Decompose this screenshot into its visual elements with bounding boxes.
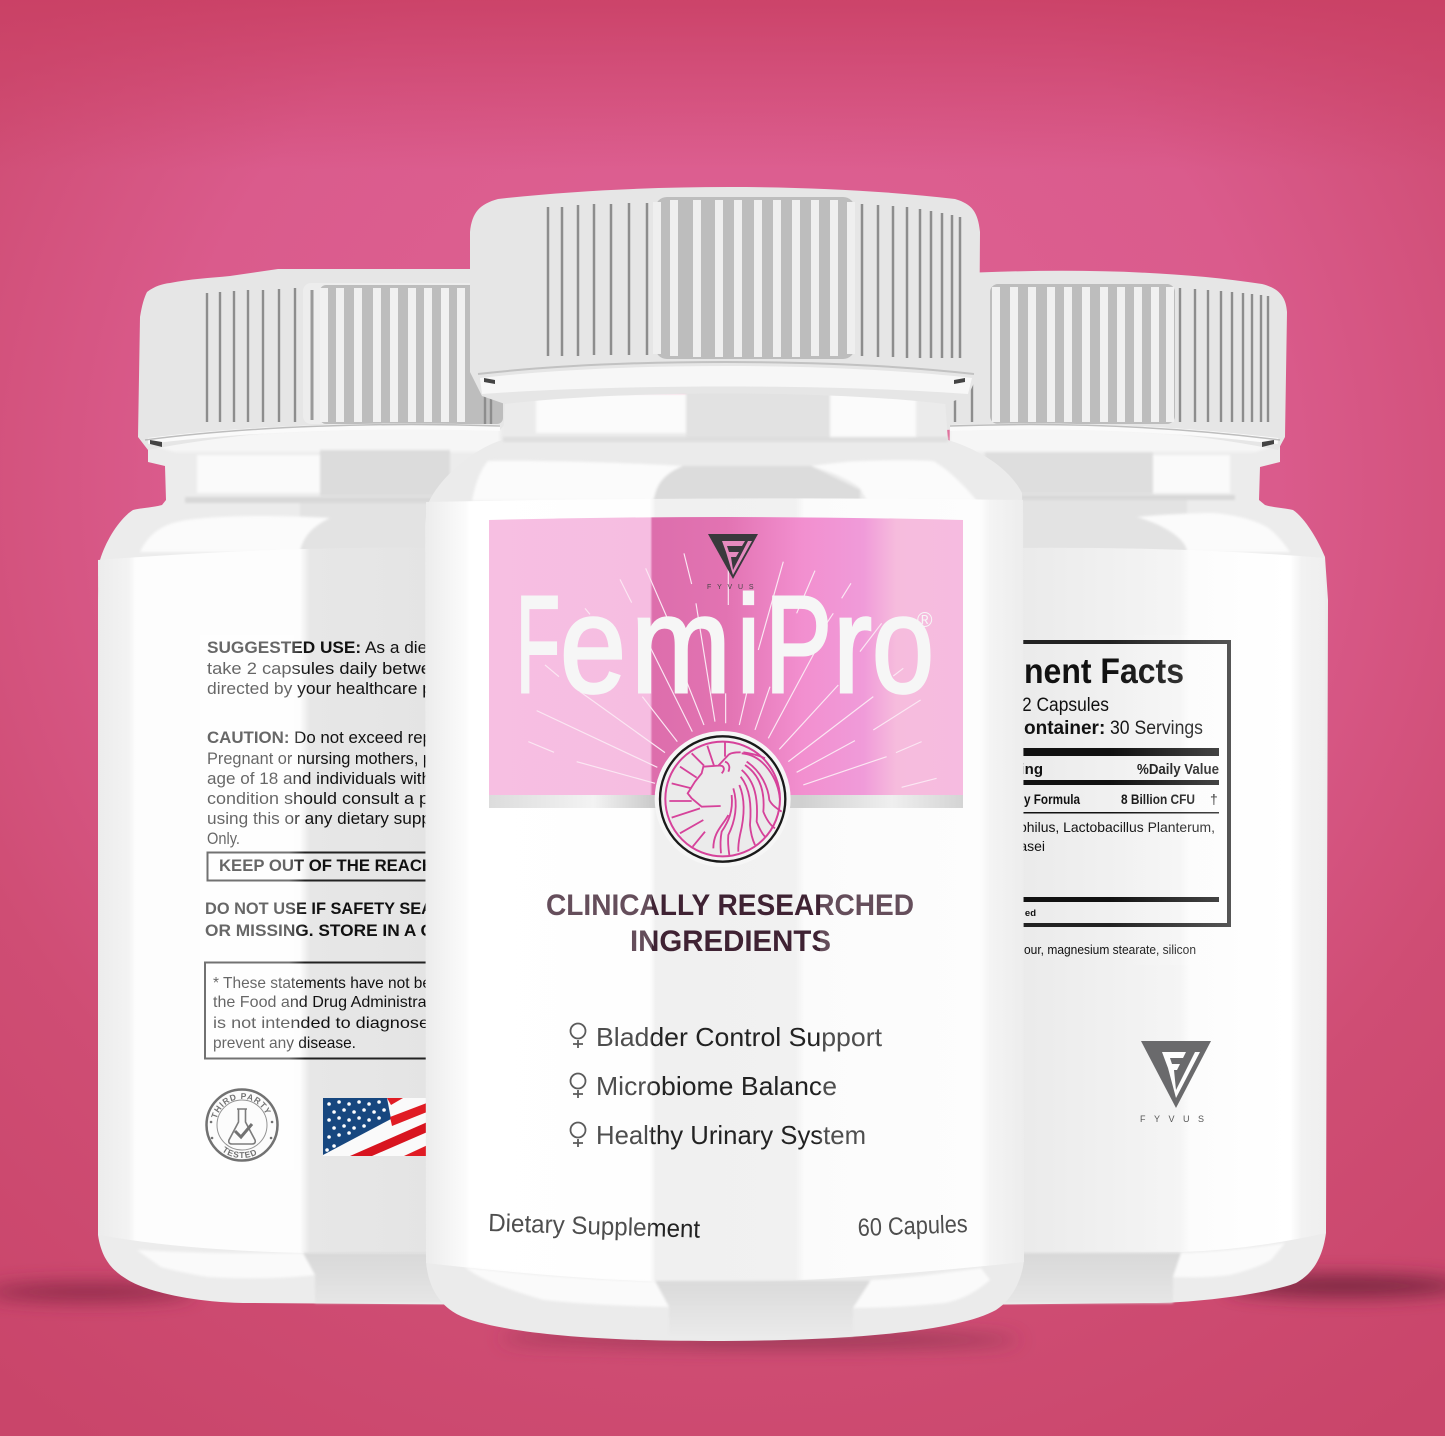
left bottle label text: SUGGESTED USE: As a diet — [207, 639, 432, 657]
storage warning: OR MISSING. STORE IN A C — [205, 921, 433, 940]
supplement facts panel: ing — [1020, 761, 1043, 778]
benefit: microbiome: Microbiome Balance — [596, 1071, 837, 1101]
supplement facts panel — [1010, 642, 1229, 957]
left bottle: back label — [98, 269, 505, 1305]
left bottle label text: age of 18 and individuals with — [207, 770, 431, 788]
dietary supplement label: Dietary Supplement — [488, 1209, 701, 1244]
benefits list — [570, 1022, 883, 1150]
supplement facts panel: nent Facts — [1024, 652, 1184, 691]
right bottle base — [950, 1243, 1285, 1303]
FDA statement box: the Food and Drug Administrat — [213, 994, 432, 1011]
sun rays — [528, 553, 937, 787]
right bottle neck — [950, 427, 1290, 552]
center bottle cap — [470, 187, 980, 404]
icon: third party tested badge — [205, 1088, 279, 1162]
center bottle shoulder — [472, 460, 977, 502]
supplement facts panel: %Daily Value — [1137, 762, 1219, 778]
keep out box: KEEP OUT OF THE REACH — [219, 856, 434, 875]
left bottle label text: using this or any dietary supp — [207, 810, 431, 828]
icon: third party tested badge: THIRD PARTY — [211, 1093, 271, 1118]
left bottle silhouette — [98, 425, 520, 1305]
benefit: bladder control: Bladder Control Support — [596, 1022, 883, 1052]
headline: CLINICALLY RESEARCHED — [546, 889, 914, 922]
supplement facts panel: 2 Capsules — [1022, 695, 1109, 716]
FDA statement box: prevent any disease. — [213, 1035, 356, 1052]
supplement facts panel: ed — [1025, 908, 1036, 919]
brand name: FemiPro: m — [631, 568, 731, 722]
headline: INGREDIENTS — [630, 925, 831, 958]
left bottle label text: take 2 capsules daily betwe — [207, 660, 431, 678]
keep out box — [208, 852, 434, 880]
storage warning — [205, 899, 433, 940]
left bottle cap — [138, 269, 505, 450]
brand name: FemiPro: i — [737, 568, 760, 722]
icon: fyvus logo — [1140, 1041, 1213, 1124]
supplement facts panel: asei — [1019, 838, 1045, 854]
brand name: FemiPro: ® — [917, 609, 933, 632]
left bottle label surface — [98, 548, 440, 1253]
right bottle cap — [945, 271, 1287, 450]
icon: woman emblem — [655, 731, 791, 867]
brand name: FemiPro: r — [833, 568, 872, 722]
brand name: FemiPro: o — [872, 568, 934, 722]
left bottle label text: condition should consult a p — [207, 790, 429, 808]
supplement facts panel: y Formula — [1024, 791, 1080, 807]
right bottle: supplement facts — [945, 271, 1328, 1305]
brand name: FemiPro — [516, 568, 934, 722]
brand name: FemiPro: F — [516, 568, 560, 722]
center bottle base — [465, 1267, 990, 1336]
brand name: FemiPro: e — [560, 568, 626, 722]
right bottle silhouette — [950, 425, 1328, 1305]
capsule count: 60 Capules — [857, 1210, 968, 1242]
left bottle base — [137, 1250, 520, 1303]
benefit: urinary system: Healthy Urinary System — [596, 1120, 866, 1150]
left bottle neck — [140, 427, 500, 553]
FDA statement box: is not intended to diagnose — [213, 1015, 429, 1032]
icon: fyvus logo on label — [707, 534, 759, 591]
right bottle label surface — [1000, 548, 1326, 1253]
icon: fyvus logo: FYVUS — [1140, 1114, 1213, 1124]
floor shadow — [0, 1275, 1445, 1346]
icon: fyvus logo on label: FYVUS — [707, 584, 759, 591]
left bottle label text: Pregnant or nursing mothers, p — [207, 750, 432, 768]
center bottle silhouette — [425, 400, 1024, 1341]
supplement facts panel: 8 Billion CFU — [1121, 791, 1195, 807]
headline — [546, 889, 914, 958]
glossy highlights over label — [489, 880, 980, 1250]
center bottle neck — [503, 390, 948, 442]
pink label band — [489, 517, 963, 808]
supplement facts panel: our, magnesium stearate, silicon — [1024, 943, 1196, 957]
supplement facts panel: † — [1210, 791, 1218, 807]
FDA statement box — [205, 962, 433, 1058]
icon: american flag — [323, 1098, 432, 1156]
icon: third party tested badge: TESTED — [224, 1146, 256, 1158]
supplement facts panel: 30 Servings — [1110, 718, 1203, 739]
supplement facts panel: ontainer: — [1024, 718, 1105, 739]
center bottle label surface — [426, 498, 1024, 1283]
storage warning: DO NOT USE IF SAFETY SEA — [205, 899, 433, 918]
brand name: FemiPro: P — [765, 568, 832, 722]
center bottle: front label — [425, 187, 1024, 1341]
supplement facts panel: philus, Lactobacillus Planterum, — [1019, 819, 1215, 835]
left bottle label text — [207, 639, 432, 848]
left bottle label text: Only. — [207, 830, 240, 848]
FDA statement box: * These statements have not be — [213, 975, 431, 992]
left bottle label text: directed by your healthcare p — [207, 680, 432, 698]
left bottle label text: CAUTION: Do not exceed rep — [207, 729, 432, 747]
